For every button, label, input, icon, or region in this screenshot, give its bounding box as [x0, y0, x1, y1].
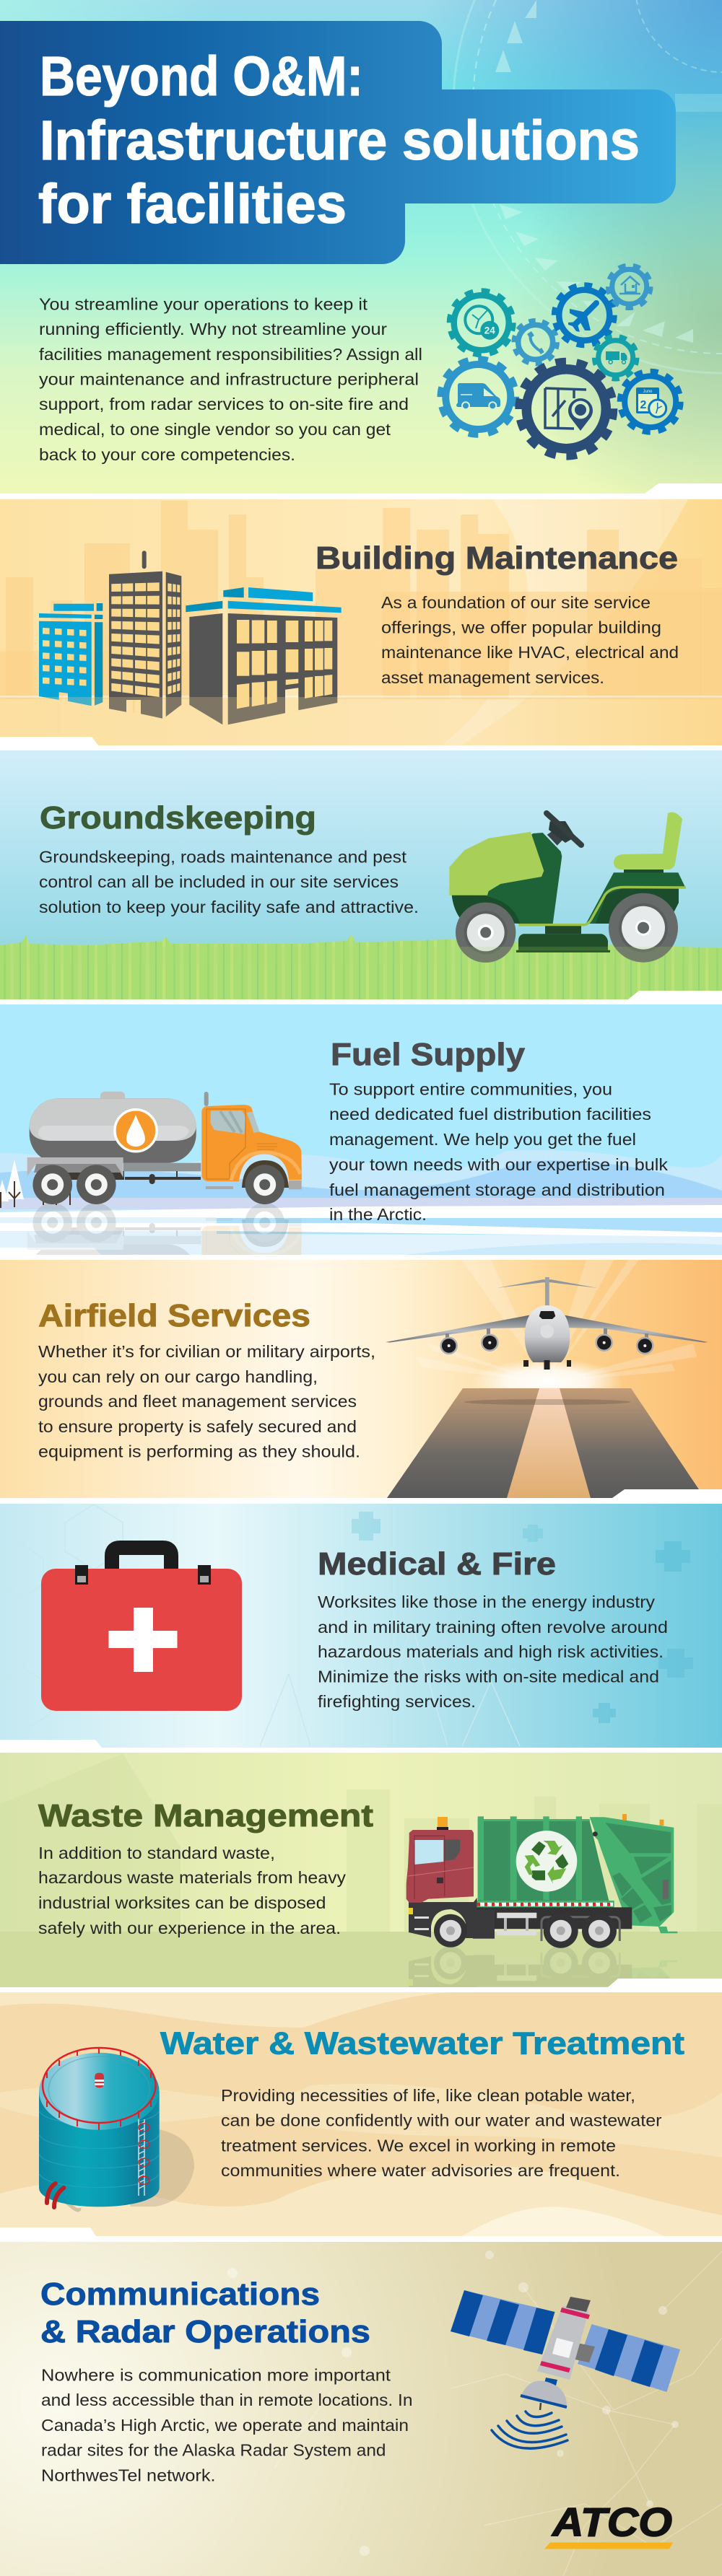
- body text: communities where water advisories are frequent.: [221, 2161, 620, 2180]
- body text: [318, 1593, 668, 1711]
- background plus signs: [352, 1512, 543, 1542]
- icon: phone gear: [514, 320, 557, 364]
- heading: Groundskeeping: [40, 800, 316, 836]
- grass: [0, 934, 722, 999]
- body text: maintenance like HVAC, electrical and: [381, 643, 679, 662]
- icon: truck gear: [594, 336, 637, 379]
- body text: firefighting services.: [318, 1692, 476, 1711]
- body text: you can rely on our cargo handling,: [38, 1367, 318, 1386]
- panel: communications and radar: [0, 2242, 722, 2576]
- body text: industrial worksites can be disposed: [38, 1893, 326, 1912]
- body text: and in military training often revolve around: [318, 1618, 668, 1637]
- icon: first aid kit: [41, 1548, 242, 1711]
- deck: [545, 926, 581, 934]
- intro text: back to your core competencies.: [39, 445, 295, 464]
- title: Beyond O&M:: [40, 45, 363, 108]
- title: [0, 21, 676, 264]
- body text: [381, 593, 679, 687]
- icon: cargo plane: [386, 1277, 708, 1370]
- body text: offerings, we offer popular building: [381, 618, 661, 636]
- body text: to ensure property is safely secured and: [38, 1417, 357, 1436]
- body text: [329, 1079, 669, 1224]
- icon: tank: [30, 1092, 196, 1163]
- icon: truck cab: [201, 1105, 302, 1188]
- icon: ride-on mower: [449, 812, 686, 963]
- body text: [38, 1844, 347, 1937]
- body text: As a foundation of our site service: [381, 593, 651, 612]
- body text: control can all be included in our site services: [39, 872, 399, 891]
- body text: hazardous materials and high risk activities.: [318, 1642, 664, 1661]
- body text: Minimize the risks with on-site medical and: [318, 1667, 659, 1686]
- intro text: medical, to one single vendor so you can get: [39, 420, 391, 439]
- body text: hazardous waste materials from heavy: [38, 1868, 347, 1887]
- intro text: support, from radar services to on-site fire and: [39, 395, 409, 413]
- heading: & Radar Operations: [40, 2314, 370, 2349]
- icon: tall dark building: [109, 551, 181, 719]
- steering: [547, 828, 563, 846]
- body text: can be done confidently with our water and wastewater: [221, 2111, 662, 2130]
- body text: your town needs with our expertise in bulk: [329, 1155, 669, 1174]
- panel: building maintenance: [0, 499, 722, 745]
- icon: fuel drop: [115, 1110, 157, 1152]
- body text: radar sites for the Alaska Radar System and: [41, 2440, 386, 2459]
- body text: and less accessible than in remote locations. In: [41, 2391, 413, 2409]
- panel: medical and fire: [0, 1504, 722, 1748]
- icon: garbage truck: [406, 1814, 677, 1948]
- network lines: [274, 2251, 722, 2576]
- icon: airplane gear: [554, 285, 614, 346]
- body text: grounds and fleet management services: [38, 1392, 357, 1411]
- body text: [41, 2365, 413, 2485]
- body text: in the Arctic.: [329, 1205, 427, 1224]
- panel: airfield services: [0, 1260, 722, 1498]
- heading: [40, 2277, 370, 2349]
- body text: equipment is performing as they should.: [38, 1442, 360, 1460]
- heading: Communications: [40, 2277, 320, 2312]
- body text: NorthwesTel network.: [41, 2466, 215, 2485]
- body text: asset management services.: [381, 668, 604, 687]
- body text: solution to keep your facility safe and attractive.: [39, 898, 419, 916]
- intro text: [39, 294, 422, 464]
- body text: Groundskeeping, roads maintenance and pest: [39, 847, 407, 866]
- heading: Medical & Fire: [318, 1546, 556, 1582]
- body: [452, 833, 562, 924]
- logo: ATCO: ATCO: [551, 2500, 672, 2544]
- panel: groundskeeping: [0, 750, 722, 999]
- panel: fuel supply: [0, 1004, 722, 1255]
- front wheel: [456, 903, 516, 963]
- icon: city buildings: [39, 551, 342, 724]
- icon: gears: [440, 266, 681, 457]
- body text: need dedicated fuel distribution facilities: [329, 1105, 651, 1123]
- icon: clock gear: [449, 291, 513, 355]
- icon: fuel tanker truck: [27, 1092, 302, 1204]
- heading: Waste Management: [38, 1798, 373, 1834]
- heading: Fuel Supply: [331, 1037, 526, 1072]
- panel: water and wastewater: [0, 1992, 722, 2236]
- body text: Worksites like those in the energy industry: [318, 1593, 656, 1611]
- icon: trees: [0, 1160, 70, 1208]
- light rays: [415, 1260, 697, 1383]
- body text: Providing necessities of life, like clean potable water,: [221, 2086, 635, 2105]
- title: for facilities: [38, 173, 347, 235]
- icon: calendar gear: 2: [640, 399, 647, 411]
- icon: satellite: [451, 2290, 680, 2448]
- body text: [39, 847, 419, 916]
- body text: [38, 1342, 375, 1460]
- icon: calendar gear: [620, 372, 681, 432]
- panel: waste management: [0, 1753, 722, 2080]
- icon: truck cab: [406, 1817, 474, 1903]
- heading: Airfield Services: [38, 1298, 310, 1333]
- body text: Canada’s High Arctic, we operate and maintain: [41, 2416, 409, 2435]
- icon: clock gear: 24: [484, 325, 495, 336]
- icon: map gear: [518, 362, 614, 457]
- icon: blue building: [39, 603, 103, 706]
- seat: [624, 869, 664, 873]
- truck reflection: [27, 1203, 302, 1315]
- icon: recycling symbol: [516, 1831, 577, 1892]
- heading: Water & Wastewater Treatment: [160, 2026, 684, 2061]
- chassis: [409, 1898, 632, 1941]
- icon: house gear: [608, 266, 651, 308]
- intro text: running efficiently. Why not streamline your: [39, 320, 387, 338]
- icon: green container: [477, 1816, 614, 1908]
- icon: calendar gear: June: [643, 390, 653, 394]
- body text: treatment services. We excel in working in remote: [221, 2136, 616, 2155]
- body text: [221, 2086, 662, 2180]
- intro text: facilities management responsibilities? Assign all: [39, 345, 422, 364]
- intro text: You streamline your operations to keep it: [39, 294, 368, 313]
- heading: Building Maintenance: [316, 540, 678, 576]
- body text: Nowhere is communication more important: [41, 2365, 391, 2384]
- icon: wide dark building: [186, 587, 342, 724]
- body text: In addition to standard waste,: [38, 1844, 275, 1862]
- icon: runway: [387, 1388, 705, 1498]
- intro text: your maintenance and infrastructure peripheral: [39, 369, 419, 388]
- panel: intro: [0, 0, 722, 494]
- title: Infrastructure solutions: [40, 110, 640, 172]
- body text: fuel management storage and distribution: [329, 1180, 665, 1199]
- truck reflection: [406, 1945, 677, 2080]
- body text: Whether it’s for civilian or military airports,: [38, 1342, 375, 1361]
- icon: rear compactor: [590, 1814, 677, 1933]
- rear wheel: [609, 893, 678, 963]
- body text: management. We help you get the fuel: [329, 1130, 636, 1149]
- body text: safely with our experience in the area.: [38, 1919, 341, 1937]
- icon: water tank: [39, 2048, 194, 2210]
- body text: To support entire communities, you: [329, 1079, 612, 1098]
- icon: van gear: [440, 359, 516, 434]
